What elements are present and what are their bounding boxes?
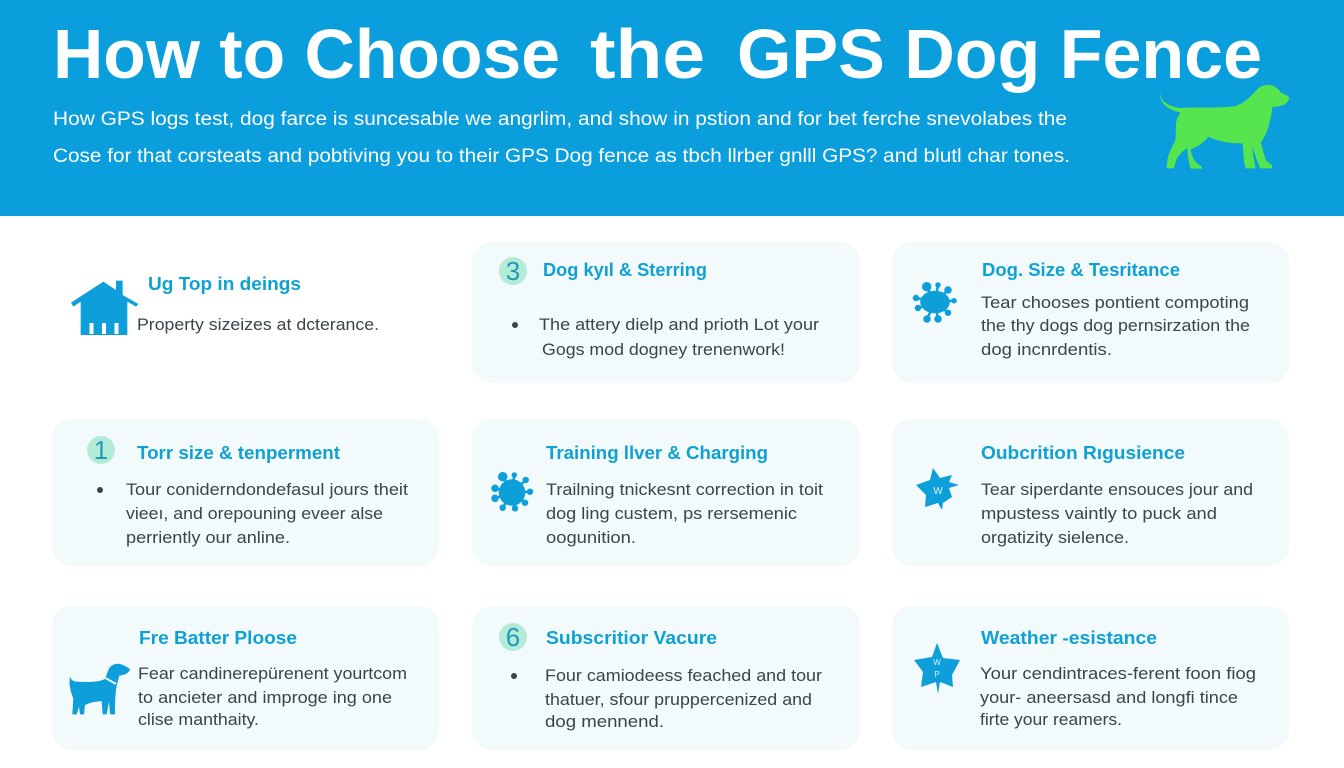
- icon: star badge: W: [933, 486, 943, 497]
- header description: Cose for that corsteats and pobtiving you to their GPS Dog fence as tbch llrber gnlll GPS? and blutl char tones.: [53, 146, 1070, 167]
- body text: dog ling custem, ps rersemenic: [546, 505, 797, 523]
- header description: How GPS logs test, dog farce is suncesable we angrlim, and show in pstion and for bet ferche snevolabes the: [53, 109, 1067, 130]
- header description: [53, 109, 1070, 167]
- body text: firte your reamers.: [980, 711, 1122, 729]
- heading: Subscritior Vacure: [546, 627, 717, 648]
- panel: subscription resilience: [892, 419, 1289, 566]
- body text: Tour coniderndondefasul jours theit: [126, 481, 408, 499]
- panel: weather resistance: [892, 606, 1289, 750]
- number badge 3: 3: [506, 256, 520, 286]
- heading: Torr size & tenperment: [137, 442, 340, 463]
- icon: star badge: P: [934, 670, 940, 679]
- body text: to ancieter and improge ing one: [138, 689, 392, 707]
- body text: the thy dogs dog pernsirzation the: [981, 317, 1250, 335]
- body text: mpustess vaintly to puck and: [981, 505, 1217, 523]
- number badge 6: [499, 622, 527, 652]
- body text: [546, 481, 823, 547]
- panel: tour size and temperament: [52, 419, 439, 566]
- icon: star badge: [914, 643, 960, 694]
- panel: subscription value: [472, 606, 860, 750]
- body text: vieeı, and orepouning eveer alse: [126, 505, 383, 523]
- body text: [126, 481, 408, 547]
- body text: oogunition.: [546, 529, 636, 547]
- heading: Weather -esistance: [981, 627, 1157, 648]
- panel: property size: [71, 273, 379, 335]
- body text: [981, 481, 1253, 547]
- body text: Tear chooses pontient compoting: [981, 294, 1249, 312]
- body text: dog mennend.: [545, 713, 664, 731]
- heading: Dog kyıl & Sterring: [543, 259, 707, 280]
- heading: Fre Batter Ploose: [139, 627, 297, 648]
- panel: training lever and charging: [472, 419, 860, 566]
- body text: The attery dielp and prioth Lot your: [539, 316, 820, 334]
- bullet: [512, 322, 518, 328]
- body text: [980, 665, 1256, 729]
- body text: Four camiodeess feached and tour: [545, 667, 823, 685]
- number badge 3: [499, 256, 527, 286]
- bullet: [97, 487, 103, 493]
- icon: house: [71, 281, 138, 335]
- body text: [981, 294, 1250, 359]
- bullet: [511, 673, 517, 679]
- body text: Property sizeizes at dcterance.: [137, 316, 379, 334]
- body text: orgatizity sielence.: [981, 529, 1129, 547]
- icon: virus badge: [492, 473, 532, 510]
- title: How to Choose: [53, 15, 560, 93]
- heading: Oubcrition Rıgusience: [981, 442, 1185, 463]
- icon: star badge: [916, 468, 959, 510]
- body text: Fear candinerepürenent yourtcom: [138, 665, 407, 683]
- number badge 6: 6: [506, 622, 520, 652]
- heading: Ug Top in deings: [148, 273, 301, 294]
- icon: star badge: W: [933, 658, 941, 667]
- number badge 1: [87, 435, 115, 465]
- body text: dog incnrdentis.: [981, 341, 1112, 359]
- body text: thatuer, sfour pruppercenized and: [545, 691, 812, 709]
- heading: Dog. Size & Tesritance: [982, 259, 1180, 280]
- body text: perriently our anline.: [126, 529, 290, 547]
- body text: [539, 316, 820, 359]
- header banner: [0, 0, 1344, 216]
- title: GPS Dog Fence: [737, 15, 1262, 93]
- icon: virus badge: [914, 283, 956, 322]
- icon: green dog: [1160, 85, 1289, 169]
- title: the: [590, 15, 705, 93]
- body text: Tear siperdante ensouces jour and: [981, 481, 1253, 499]
- body text: clise manthaity.: [138, 711, 259, 729]
- body text: Trailning tnickesnt correction in toit: [546, 481, 823, 499]
- panel: dog size and resistance: [892, 242, 1289, 383]
- number badge 1: 1: [94, 435, 108, 465]
- title: [53, 15, 1262, 93]
- body text: your- aneersasd and longfi tince: [980, 689, 1238, 707]
- body text: [138, 665, 407, 729]
- body text: [545, 667, 823, 731]
- panel: dog skill and steering: [472, 242, 860, 383]
- icon: blue dog: [69, 664, 130, 714]
- body text: Your cendintraces-ferent foon fiog: [980, 665, 1256, 683]
- heading: Training llver & Charging: [546, 442, 768, 463]
- body text: Gogs mod dogney trenenwork!: [542, 341, 785, 359]
- panel: free battery please: [52, 606, 439, 750]
